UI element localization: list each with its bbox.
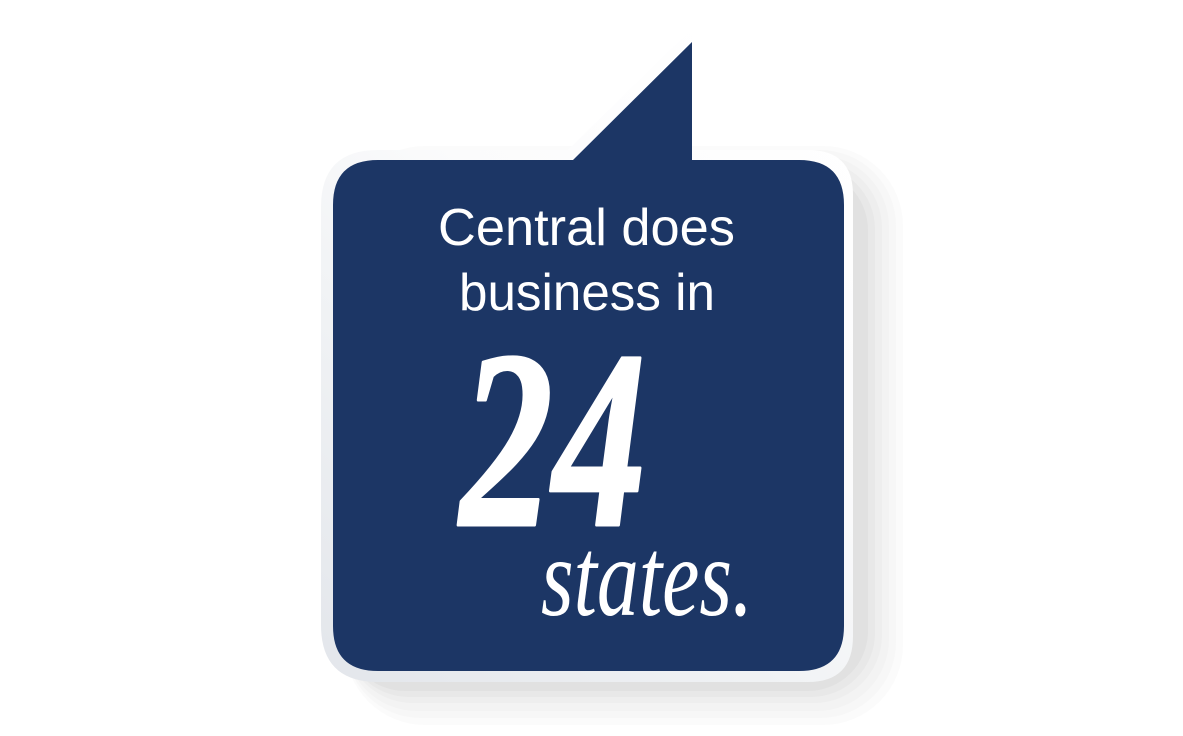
heading text <box>438 199 735 322</box>
heading text: business in <box>459 264 715 322</box>
bubble body with pointer <box>333 42 844 671</box>
bubble shadow <box>345 146 903 725</box>
bubble outline <box>321 28 853 682</box>
word: states.: states. <box>541 516 753 640</box>
big number: 24: 24 <box>457 299 646 580</box>
speech bubble <box>321 28 903 725</box>
heading text: Central does <box>438 199 735 257</box>
